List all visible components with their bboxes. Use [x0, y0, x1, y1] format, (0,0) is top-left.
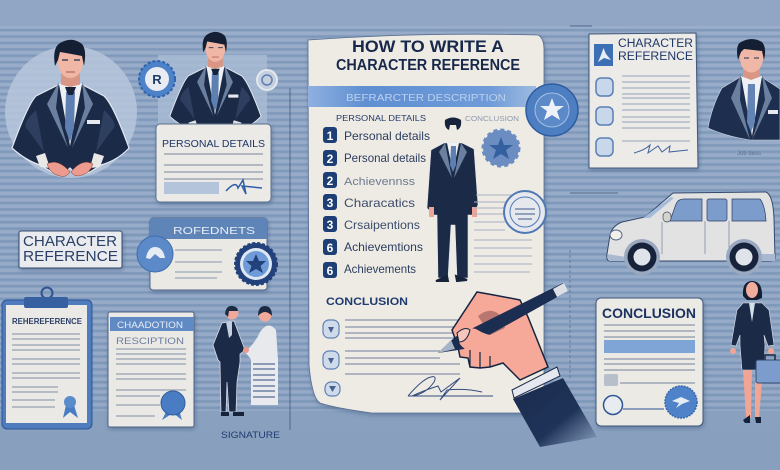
numbered list: 1 — [327, 129, 334, 143]
icon: R seal — [139, 61, 175, 97]
seal: star badge — [526, 84, 578, 136]
heading: conclusion: CONCLUSION — [326, 296, 408, 308]
icon: gear star — [483, 130, 519, 166]
numbered list: Achievements — [344, 262, 416, 276]
numbered list: Personal details — [344, 129, 430, 143]
label: character reference — [19, 231, 122, 268]
numbered list: 3 — [327, 218, 334, 232]
figure: businesswoman with briefcase — [730, 281, 780, 423]
label: character reference: REFERENCE — [23, 249, 118, 265]
numbered list: Crsaipentions — [344, 218, 420, 232]
illustration: hand writing with pen — [438, 283, 597, 447]
document: conclusion: CONCLUSION — [602, 306, 696, 321]
label: character reference: CHARACTER — [23, 234, 117, 250]
palm shadow — [478, 311, 505, 335]
thumb — [457, 322, 530, 362]
figure: man behind card — [170, 32, 261, 139]
pen — [438, 283, 568, 353]
clipboard: REHEREFERENCE — [12, 317, 83, 326]
document: character reference right: REFERENCE — [618, 51, 693, 63]
card: referees: ROFEDNETS — [173, 225, 255, 237]
signature — [408, 377, 493, 400]
icon: small round badge — [257, 70, 277, 90]
numbered list: Characatics — [344, 196, 415, 210]
icon: ribbon — [63, 396, 78, 418]
conclusion text lines — [345, 320, 460, 374]
icon: small circle — [604, 396, 664, 414]
document: conclusion — [596, 298, 703, 426]
panel: personal details with man — [139, 32, 277, 202]
document: character description: CHAADOTION — [117, 320, 183, 330]
figure: man bust right — [708, 39, 780, 140]
subheading: conclusion: CONCLUSION — [465, 116, 519, 123]
numbered list: Personal details — [344, 151, 426, 165]
icon: seal — [665, 386, 697, 418]
icon: ribbon — [161, 391, 185, 420]
numbered list: 6 — [327, 264, 334, 278]
title — [336, 37, 520, 74]
document: character reference right — [589, 33, 698, 168]
numbered list: Achievennss — [344, 176, 416, 188]
icon: handshake circle — [137, 236, 173, 272]
cuff — [512, 367, 560, 398]
document: character description: RESCIPTION — [116, 336, 184, 347]
text: signature caption: SIGNATURE — [221, 430, 280, 441]
icons — [596, 78, 613, 156]
figure: headless suit — [427, 118, 478, 281]
blue band: character description: BEFRARCTER DESCRIPTION — [346, 92, 506, 104]
hand — [452, 292, 548, 380]
caption: job title: Job bess — [737, 151, 761, 157]
icon: star seal — [235, 243, 277, 285]
numbered list: 3 — [327, 196, 334, 210]
numbered list: 2 — [327, 152, 334, 166]
document lines — [474, 195, 532, 272]
icon: blue square — [594, 44, 613, 66]
figure: man in suit with circle backdrop — [5, 40, 137, 178]
icon: round stamp — [504, 191, 546, 233]
icon: R seal: R — [152, 72, 162, 87]
numbered list: Achievemtions — [344, 240, 423, 254]
figure: handshake — [213, 306, 278, 416]
clipboard — [2, 288, 92, 429]
blue band: character description — [308, 86, 536, 107]
wheels — [624, 239, 762, 275]
card: personal details — [156, 124, 271, 202]
sleeve — [513, 378, 597, 447]
illustration: van — [607, 192, 775, 275]
finger lines — [470, 350, 490, 368]
numbered list — [323, 127, 430, 278]
thumbnail — [457, 329, 470, 342]
subheading: personal details: PERSONAL DETAILS — [336, 113, 426, 123]
card: referees — [137, 218, 277, 290]
numbered list: 2 — [327, 174, 334, 188]
card: personal details: PERSONAL DETAILS — [162, 138, 265, 150]
title: CHARACTER REFERENCE — [336, 57, 520, 74]
numbered list: 6 — [327, 241, 334, 255]
document: character description — [108, 312, 194, 427]
check icons — [323, 320, 340, 396]
briefcase — [756, 355, 780, 383]
document: character reference right: CHARACTER — [618, 38, 693, 50]
divider line — [289, 88, 291, 430]
main paper panel — [308, 34, 546, 413]
title: HOW TO WRITE A — [352, 37, 504, 56]
